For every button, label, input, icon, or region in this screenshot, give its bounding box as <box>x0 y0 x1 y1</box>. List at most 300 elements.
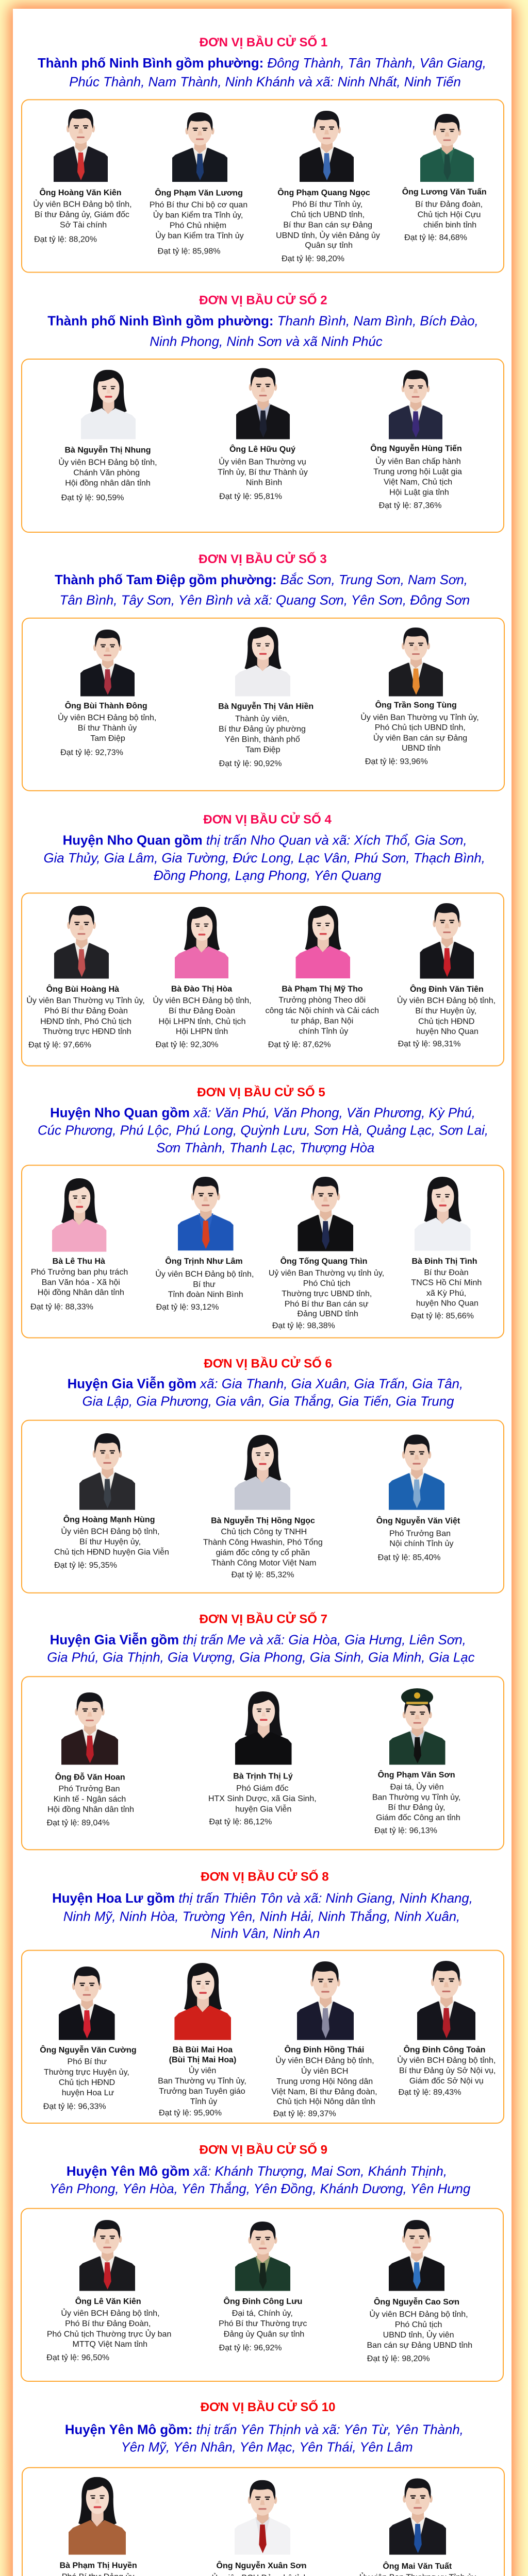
role: Trưởng ban Tuyên giáo <box>159 2087 245 2096</box>
area description: Sơn Thành, Thanh Lạc, Thượng Hòa <box>156 1141 374 1155</box>
name: Ông Đinh Văn Tiên <box>410 984 484 994</box>
role: Chủ tịch HĐND <box>59 2078 115 2087</box>
area description: Huyện Gia Viễn gồm xã: Gia Thanh, Gia Xuân, Gia Trấn, Gia Tân, <box>68 1377 463 1392</box>
portrait <box>298 1177 353 1251</box>
role: Hội Luật gia tỉnh <box>389 488 449 497</box>
candidate: Ông Bùi Hoàng Hà <box>26 906 145 1049</box>
rate: Đạt tỷ lệ: 87,36% <box>379 501 441 510</box>
area description: Gia Lập, Gia Phương, Gia vân, Gia Thắng, Gia Tiến, Gia Trung <box>82 1394 454 1409</box>
area description: Huyện Nho Quan gồm xã: Văn Phú, Văn Phong, Văn Phương, Kỳ Phú, <box>50 1106 475 1120</box>
section: đơn vị bầu cử số 4 <box>22 812 504 1066</box>
role: Hội LHPN tỉnh, Chủ tịch <box>159 1017 245 1026</box>
role: Thành ủy viên, <box>235 715 289 723</box>
role: Chủ tịch Hội Nông dân tỉnh <box>276 2097 375 2106</box>
role: giám đốc công ty cổ phần <box>216 1548 310 1557</box>
section: đơn vị bầu cử số 2 <box>22 293 504 532</box>
role: Yên Bình, thành phố <box>225 735 300 744</box>
role: Phó Trưởng Ban <box>389 1529 451 1538</box>
candidate: Ông Nguyễn Văn Cường <box>40 1967 137 2111</box>
section: đơn vị bầu cử số 6 <box>22 1355 504 1593</box>
name: Ông Phạm Văn Lương <box>155 188 243 198</box>
role: Ban Thường vụ Tỉnh ủy, <box>372 1793 460 1802</box>
portrait <box>235 1691 292 1765</box>
role: Việt Nam, Chủ tịch <box>384 478 452 486</box>
role: Ủy viên BCH Đảng bộ tỉnh, <box>58 713 156 722</box>
role: Ủy viên Ban cán sự Đảng <box>373 733 467 742</box>
candidate: Ông Trịnh Như Lâm <box>155 1177 254 1312</box>
name: Ông Mai Văn Tuất <box>383 2561 452 2571</box>
candidates card <box>21 2209 503 2381</box>
portrait <box>236 368 290 439</box>
rate: Đạt tỷ lệ: 92,73% <box>60 748 123 757</box>
name: Ông Đỗ Văn Hoan <box>55 1772 125 1782</box>
candidate: Ông Phạm Văn Sơn <box>372 1688 460 1835</box>
candidate: Ông Đỗ Văn Hoan <box>47 1692 134 1827</box>
name: Ông Nguyễn Hùng Tiến <box>370 443 462 453</box>
candidate: Bà Lê Thu Hà <box>30 1178 128 1311</box>
candidates card <box>22 1420 504 1593</box>
role: Chủ tịch Hội Cựu <box>418 210 481 219</box>
role: Bí thư Đảng Đoàn <box>169 1007 235 1015</box>
name: Bà Phạm Thị Mỹ Tho <box>282 985 363 993</box>
role: Thành Công Hwashin, Phó Tổng <box>203 1537 323 1547</box>
role: Việt Nam, Bí thư Đảng đoàn, <box>271 2088 377 2096</box>
area description: Phúc Thành, Nam Thành, Ninh Khánh và xã: Ninh Nhất, Ninh Tiến <box>69 75 461 90</box>
name: Ông Nguyễn Văn Cường <box>40 2045 137 2055</box>
role: Kinh tế - Ngân sách <box>54 1795 126 1804</box>
role: Ủy viên BCH Đảng bộ tỉnh, <box>275 2056 374 2065</box>
rate: Đạt tỷ lệ: 96,33% <box>43 2102 106 2111</box>
role: Đại tá, Chính ủy, <box>232 2309 293 2318</box>
heading: ĐƠN VỊ BẦU CỬ SỐ 1 <box>200 35 327 49</box>
area description: Huyện Yên Mô gồm: thị trấn Yên Thịnh và xã: Yên Từ, Yên Thành, <box>65 2422 464 2437</box>
candidate: Ông Lê Văn Kiên <box>46 2220 171 2362</box>
section: đơn vị bầu cử số 7 <box>22 1612 504 1850</box>
candidates card <box>22 1951 504 2123</box>
role: Phó Trưởng ban phụ trách <box>31 1268 128 1277</box>
section: đơn vị bầu cử số 10 <box>22 2399 504 2576</box>
role: Phó Bí thư Thường trực <box>219 2319 307 2328</box>
role: Phó Bí thư Chi bộ cơ quan <box>150 201 248 209</box>
section: đơn vị bầu cử số 9 <box>21 2142 503 2381</box>
portrait <box>59 1967 115 2040</box>
candidate: Ông Đinh Công Toản <box>397 1961 496 2097</box>
role: Chánh Văn phòng <box>73 469 140 477</box>
portrait <box>297 1961 354 2040</box>
rate: Đạt tỷ lệ: 95,90% <box>159 2109 222 2117</box>
role: Phó Bí thư <box>68 2058 107 2066</box>
area description: Ninh Vân, Ninh An <box>211 1927 320 1941</box>
role: Chủ tịch Công ty TNHH <box>221 1528 307 1536</box>
name: Bà Đinh Thị Tình <box>411 1257 477 1266</box>
role: Trưởng phòng Theo dõi <box>278 996 366 1005</box>
heading: ĐƠN VỊ BẦU CỬ SỐ 2 <box>199 293 327 308</box>
role: Thường trực UBND tỉnh, <box>282 1290 372 1298</box>
role: Ủy viên BCH Đảng bộ tỉnh, <box>397 995 496 1005</box>
role: Chủ tịch HĐND huyện Gia Viễn <box>54 1547 169 1556</box>
portrait <box>235 1435 290 1510</box>
name: Bà Phạm Thị Huyền <box>60 2562 137 2570</box>
portrait <box>69 2477 126 2555</box>
role: Phó Chủ tịch <box>303 1279 350 1288</box>
name: Ông Nguyễn Văn Việt <box>376 1516 460 1526</box>
candidates card <box>22 1676 504 1850</box>
candidates card <box>22 359 504 532</box>
role: Quân sự tỉnh <box>305 241 353 250</box>
name: Ông Trần Song Tùng <box>375 700 457 710</box>
role: Ủy viên BCH Đảng bộ tỉnh, <box>397 2055 496 2065</box>
role: Hội đồng Nhân dân tỉnh <box>47 1805 134 1814</box>
role: Ủy ban Kiểm tra Tỉnh ủy <box>155 231 244 241</box>
role: Ủy viên Ban Thường vụ <box>219 456 306 467</box>
role: Bí thư Đảng đoàn, <box>415 200 483 209</box>
portrait <box>300 111 354 182</box>
candidate: Ông Bùi Thành Đông <box>58 630 156 757</box>
candidate: Bà Đinh Thị Tình <box>411 1177 482 1320</box>
area description: Ninh Mỹ, Ninh Hòa, Trường Yên, Ninh Hải, Ninh Thắng, Ninh Xuân, <box>63 1909 460 1924</box>
role: UBND tỉnh, Ủy viên Đảng ủy <box>276 230 380 240</box>
candidate: Ông Nguyễn Cao Sơn <box>367 2220 472 2363</box>
area description: Yên Phong, Yên Hòa, Yên Thắng, Yên Đồng, Khánh Dương, Yên Hưng <box>50 2181 471 2196</box>
heading: ĐƠN VỊ BẦU CỬ SỐ 3 <box>199 551 327 566</box>
role: Giám đốc Sở Nội vụ <box>409 2077 484 2086</box>
heading: ĐƠN VỊ BẦU CỬ SỐ 4 <box>203 812 332 827</box>
role: Bí thư Đảng ủy, Giám đốc <box>35 210 129 219</box>
area description: Đồng Phong, Lạng Phong, Yên Quang <box>154 869 382 883</box>
role: công tác Nội chính và Cải cách <box>266 1006 379 1015</box>
role: Bí thư Đảng ủy, <box>388 1803 445 1812</box>
candidates card <box>22 1165 504 1338</box>
area description: Tân Bình, Tây Sơn, Yên Bình và xã: Quang Sơn, Yên Sơn, Đông Sơn <box>60 594 470 608</box>
candidate: Ông Nguyễn Hùng Tiến <box>370 370 462 510</box>
rate: Đạt tỷ lệ: 97,66% <box>28 1041 91 1049</box>
portrait <box>178 1177 234 1250</box>
candidate: Bà Đào Thị Hòa <box>153 907 252 1049</box>
portrait <box>420 114 474 182</box>
role: Ban cán sự Đảng UBND tỉnh <box>367 2341 472 2350</box>
rate: Đạt tỷ lệ: 95,35% <box>54 1561 117 1570</box>
candidate: Ông Đinh Văn Tiên <box>397 903 496 1048</box>
role: Ủy viên BCH Đảng bộ tỉnh, <box>369 2309 468 2319</box>
heading: ĐƠN VỊ BẦU CỬ SỐ 10 <box>201 2399 335 2414</box>
name: Bà Nguyễn Thị Nhung <box>64 445 151 455</box>
role: HTX Sinh Dược, xã Gia Sinh, <box>208 1794 317 1803</box>
rate: Đạt tỷ lệ: 87,62% <box>268 1040 331 1049</box>
portrait <box>174 1963 231 2040</box>
heading: ĐƠN VỊ BẦU CỬ SỐ 8 <box>201 1869 329 1884</box>
name: Ông Lê Hữu Quý <box>229 444 295 454</box>
role: Thành Công Motor Việt Nam <box>211 1558 316 1567</box>
area description: Gia Thủy, Gia Lâm, Gia Tường, Đức Long, Lạc Vân, Phú Sơn, Thạch Bình, <box>44 851 485 866</box>
role: Ủy viên BCH Đảng bộ tỉnh, <box>153 995 252 1005</box>
role: TNCS Hồ Chí Minh <box>411 1279 482 1287</box>
role: Tỉnh ủy, Bí thư Thành ủy <box>218 468 308 477</box>
name: Ông Lê Văn Kiên <box>75 2296 141 2306</box>
role: Phó Chủ nhiệm <box>170 222 226 230</box>
role: huyện Hoa Lư <box>62 2089 114 2097</box>
role: Ủy viên Ban Thường vụ Tỉnh ủy, <box>26 995 145 1005</box>
portrait <box>389 370 442 439</box>
candidate: Ông Đinh Công Lưu <box>219 2222 307 2352</box>
name: Ông Nguyễn Xuân Sơn <box>217 2561 306 2570</box>
role: Bí thư Đoàn <box>424 1268 469 1277</box>
role: Ủy viên BCH <box>301 2066 348 2076</box>
rate: Đạt tỷ lệ: 84,68% <box>404 233 467 242</box>
rate: Đạt tỷ lệ: 90,92% <box>219 759 282 768</box>
role: Bí thư Huyện ủy, <box>415 1007 476 1015</box>
heading: ĐƠN VỊ BẦU CỬ SỐ 6 <box>204 1355 332 1370</box>
area description: Huyện Nho Quan gồm thị trấn Nho Quan và xã: Xích Thổ, Gia Sơn, <box>63 833 467 848</box>
role: Đảng ủy Quân sự tỉnh <box>224 2330 304 2338</box>
rate: Đạt tỷ lệ: 98,20% <box>282 255 344 263</box>
heading: ĐƠN VỊ BẦU CỬ SỐ 9 <box>200 2142 327 2157</box>
candidate: Ông Lê Hữu Quý <box>218 368 308 501</box>
role: Phó Bí thư Đảng Đoàn, <box>65 2319 151 2328</box>
name: Ông Phạm Văn Sơn <box>378 1770 455 1780</box>
rate: Đạt tỷ lệ: 89,04% <box>47 1819 109 1827</box>
portrait <box>389 2220 444 2291</box>
name: Ông Lương Văn Tuấn <box>402 187 487 197</box>
candidate: Ông Hoàng Văn Kiên <box>33 109 132 244</box>
area description: Yên Mỹ, Yên Nhân, Yên Mạc, Yên Thái, Yên Lâm <box>121 2440 413 2454</box>
role: Trung ương hội Luật gia <box>373 468 462 476</box>
candidate: Ông Phạm Quang Ngọc <box>276 111 380 263</box>
name: Bà Nguyễn Thị Hồng Ngọc <box>211 1516 315 1525</box>
rate: Đạt tỷ lệ: 85,40% <box>378 1553 441 1562</box>
portrait <box>417 1961 475 2040</box>
role: Bí thư Thành ủy <box>78 724 137 733</box>
area description: Gia Phú, Gia Thịnh, Gia Vượng, Gia Phong, Gia Sinh, Gia Minh, Gia Lạc <box>47 1651 475 1665</box>
candidate: Bà Nguyễn Thị Hồng Ngọc <box>203 1435 323 1579</box>
role: Ban Văn hóa - Xã hội <box>42 1278 120 1287</box>
role: Tỉnh ủy <box>190 2097 217 2106</box>
role: Thường trực Huyện ủy, <box>44 2068 129 2077</box>
role: Ủy viên Ban chấp hành <box>375 456 461 466</box>
role: Chủ tịch UBND tỉnh, <box>291 210 365 219</box>
name: Ông Bùi Hoàng Hà <box>46 984 119 994</box>
role: Ủy viên <box>189 2065 216 2075</box>
name: Bà Lê Thu Hà <box>53 1257 105 1266</box>
candidate: Ông Nguyễn Văn Việt <box>376 1434 460 1562</box>
role: Ban Thường vụ Tỉnh ủy, <box>158 2077 246 2086</box>
role: MTTQ Việt Nam tỉnh <box>73 2340 147 2349</box>
rate: Đạt tỷ lệ: 92,30% <box>156 1040 218 1049</box>
rate: Đạt tỷ lệ: 98,31% <box>398 1040 460 1048</box>
role: Trung ương Hội Nông dân <box>276 2077 373 2086</box>
name: Ông Nguyễn Cao Sơn <box>374 2297 459 2307</box>
role: Ủy viên BCH Đảng bộ tỉnh, <box>61 1526 160 1536</box>
role: huyện Gia Viễn <box>235 1804 291 1814</box>
name: Ông Đinh Công Lưu <box>224 2296 302 2306</box>
role: Giám đốc Công an tỉnh <box>376 1814 460 1822</box>
area description: Huyện Hoa Lư gồm thị trấn Thiên Tôn và xã: Ninh Giang, Ninh Khang, <box>52 1891 473 1906</box>
role: Bí thư Đảng ủy Sở Nội vụ, <box>399 2066 496 2075</box>
name: (Bùi Thị Mai Hoa) <box>169 2056 236 2064</box>
portrait <box>172 112 227 182</box>
name: Ông Bùi Thành Đông <box>65 701 147 710</box>
role: Phó Bí thư Đảng Đoàn <box>44 1007 128 1015</box>
rate: Đạt tỷ lệ: 89,37% <box>273 2109 336 2119</box>
role: xã Kỳ Phú, <box>426 1289 466 1298</box>
area description: Thành phố Ninh Bình gồm phường: Thanh Bình, Nam Bình, Bích Đào, <box>47 314 478 329</box>
candidates card <box>22 2468 504 2576</box>
rate: Đạt tỷ lệ: 93,12% <box>156 1303 219 1312</box>
name: Bà Đào Thị Hòa <box>171 985 232 993</box>
section: đơn vị bầu cử số 8 <box>22 1869 504 2123</box>
portrait <box>52 1178 106 1252</box>
portrait <box>54 906 109 979</box>
rate: Đạt tỷ lệ: 98,20% <box>367 2354 430 2363</box>
section: đơn vị bầu cử số 1 <box>22 35 504 272</box>
candidate: Ông Trần Song Tùng <box>360 628 479 766</box>
role: Ủy viên BCH Đảng bộ tỉnh, <box>155 1269 254 1279</box>
role: Uỷ viên Ban Thường vụ tỉnh ủy, <box>269 1269 384 1278</box>
section: đơn vị bầu cử số 3 <box>22 551 504 791</box>
heading: ĐƠN VỊ BẦU CỬ SỐ 7 <box>200 1612 327 1626</box>
candidate: Ông Mai Văn Tuất <box>359 2478 477 2576</box>
area description: Huyện Gia Viễn gồm thị trấn Me và xã: Gia Hòa, Gia Hưng, Liên Sơn, <box>50 1633 466 1648</box>
portrait <box>296 906 350 978</box>
rate: Đạt tỷ lệ: 85,32% <box>232 1570 294 1579</box>
name: Ông Hoàng Văn Kiên <box>39 188 122 197</box>
rate: Đạt tỷ lệ: 86,12% <box>209 1818 272 1826</box>
role: Ninh Bình <box>246 478 282 487</box>
rate: Đạt tỷ lệ: 88,20% <box>34 235 97 244</box>
role: Bí thư Ban cán sự Đảng <box>283 221 372 230</box>
role: Thường trực HĐND tỉnh <box>43 1027 131 1036</box>
rate: Đạt tỷ lệ: 96,92% <box>219 2344 282 2352</box>
role: Bí thư <box>193 1280 216 1289</box>
role: Ủy viên Ban Thường vụ Tỉnh ủy, <box>360 712 479 722</box>
portrait <box>61 1692 118 1765</box>
rate: Đạt tỷ lệ: 93,96% <box>365 757 428 766</box>
name: Ông Tống Quang Thìn <box>280 1256 367 1266</box>
role: Phó Chủ tịch Thường trực Ủy ban <box>47 2329 171 2338</box>
portrait <box>81 370 136 439</box>
candidate: Ông Tống Quang Thìn <box>269 1177 384 1330</box>
role: Tỉnh đoàn Ninh Bình <box>168 1291 243 1299</box>
role: Phó Giám đốc <box>236 1784 288 1793</box>
rate: Đạt tỷ lệ: 96,13% <box>374 1826 437 1835</box>
role: Bí thư Huyện ủy, <box>79 1538 141 1547</box>
name: Ông Trịnh Như Lâm <box>165 1256 243 1266</box>
candidate: Ông Lương Văn Tuấn <box>402 114 487 242</box>
name: Bà Trịnh Thị Lý <box>233 1772 293 1781</box>
rate: Đạt tỷ lệ: 98,38% <box>272 1321 335 1330</box>
role: Bí thư Đảng ủy phường <box>219 725 306 734</box>
role: chiến binh tỉnh <box>423 221 476 230</box>
area description: Thành phố Ninh Bình gồm phường: Đông Thành, Tân Thành, Vân Giang, <box>38 56 486 71</box>
candidate: Bà Phạm Thị Mỹ Tho <box>266 906 379 1049</box>
candidate: Bà Nguyễn Thị Nhung <box>58 370 157 502</box>
heading: ĐƠN VỊ BẦU CỬ SỐ 5 <box>197 1084 325 1099</box>
role: Tam Điệp <box>245 745 280 754</box>
candidate: Bà Trịnh Thị Lý <box>208 1691 317 1826</box>
rate: Đạt tỷ lệ: 85,66% <box>411 1312 474 1320</box>
rate: Đạt tỷ lệ: 88,33% <box>30 1302 93 1311</box>
role: UBND tỉnh <box>402 744 441 753</box>
name: Bà Bùi Mai Hoa <box>173 2045 233 2054</box>
area description: Thành phố Tam Điệp gồm phường: Bắc Sơn, Trung Sơn, Nam Sơn, <box>55 573 468 587</box>
role: huyện Nho Quan <box>416 1299 478 1308</box>
candidates card <box>22 893 504 1066</box>
portrait <box>79 2220 135 2291</box>
portrait <box>235 627 290 697</box>
rate: Đạt tỷ lệ: 96,50% <box>46 2353 109 2362</box>
role: Phó Chủ tịch UBND tỉnh, <box>375 723 466 732</box>
portrait <box>235 2480 290 2555</box>
role: Nội chính Tỉnh ủy <box>389 1539 454 1548</box>
portrait <box>389 628 443 697</box>
candidates card <box>22 618 504 791</box>
role: Sở Tài chính <box>60 221 107 230</box>
candidate: Ông Nguyễn Xuân Sơn <box>212 2480 310 2576</box>
candidates card <box>22 100 504 272</box>
role: Ủy viên BCH Đảng bộ tỉnh, <box>33 199 132 209</box>
role: Phó Bí thư Ban cán sự <box>285 1300 369 1309</box>
candidate: Bà Bùi Mai Hoa <box>158 1963 246 2117</box>
role: Hội đồng Nhân dân tỉnh <box>38 1289 124 1297</box>
rate: Đạt tỷ lệ: 90,59% <box>61 494 124 502</box>
area description: Cúc Phương, Phú Lộc, Phú Long, Quỳnh Lưu, Sơn Hà, Quảng Lạc, Sơn Lai, <box>38 1123 488 1138</box>
role: Đảng UBND tỉnh <box>298 1310 358 1318</box>
rate: Đạt tỷ lệ: 89,43% <box>399 2088 461 2097</box>
role: Tam Điệp <box>90 734 125 743</box>
area description: Ninh Phong, Ninh Sơn và xã Ninh Phúc <box>150 334 383 349</box>
name: Ông Đinh Hồng Thái <box>285 2044 364 2054</box>
name: Ông Phạm Quang Ngọc <box>277 188 370 197</box>
portrait <box>420 903 474 979</box>
name: Ông Hoàng Mạnh Hùng <box>63 1515 155 1524</box>
portrait <box>389 2478 446 2555</box>
role: Chủ tịch HĐND <box>418 1017 474 1026</box>
role: chính Tỉnh ủy <box>299 1027 348 1036</box>
rate: Đạt tỷ lệ: 85,98% <box>158 247 221 256</box>
role: UBND tỉnh, Ủy viên <box>383 2330 454 2340</box>
role: Phó Bí thư Tỉnh ủy, <box>292 200 362 209</box>
section: đơn vị bầu cử số 5 <box>22 1084 504 1338</box>
portrait <box>389 1688 446 1765</box>
role: Phó Trưởng Ban <box>58 1785 120 1793</box>
role: Hội đồng nhân dân tỉnh <box>65 479 151 488</box>
role: Đại tá, Ủy viên <box>390 1782 444 1791</box>
portrait <box>389 1434 444 1510</box>
name: Ông Đinh Công Toản <box>404 2044 485 2054</box>
candidate: Bà Nguyễn Thị Vân Hiền <box>218 627 314 768</box>
candidate: Ông Hoàng Mạnh Hùng <box>54 1433 169 1570</box>
name: Bà Nguyễn Thị Vân Hiền <box>218 701 314 711</box>
portrait <box>80 630 135 697</box>
role: Ủy viên BCH Đảng bộ tỉnh, <box>61 2308 160 2318</box>
portrait <box>79 1433 135 1510</box>
area description: Huyện Yên Mô gồm xã: Khánh Thượng, Mai Sơn, Khánh Thịnh, <box>67 2164 447 2179</box>
candidate: Ông Đinh Hồng Thái <box>271 1961 377 2119</box>
candidate: Bà Phạm Thị Huyền <box>43 2477 155 2576</box>
role: Ủy viên BCH Đảng bộ tỉnh, <box>58 457 157 467</box>
role: HĐND tỉnh, Phó Chủ tịch <box>40 1017 131 1026</box>
portrait <box>54 109 108 182</box>
role: Ủy ban Kiểm tra Tỉnh ủy, <box>153 210 243 219</box>
role: tư pháp, Ban Nội <box>291 1017 353 1025</box>
rate: Đạt tỷ lệ: 95,81% <box>219 492 282 501</box>
role: Phó Chủ tịch <box>395 2320 442 2329</box>
role: Hội LHPN tỉnh <box>176 1027 228 1036</box>
candidate: Ông Phạm Văn Lương <box>150 112 248 256</box>
portrait <box>235 2222 290 2291</box>
portrait <box>415 1177 470 1251</box>
portrait <box>175 907 228 978</box>
role: huyện Nho Quan <box>416 1027 478 1036</box>
